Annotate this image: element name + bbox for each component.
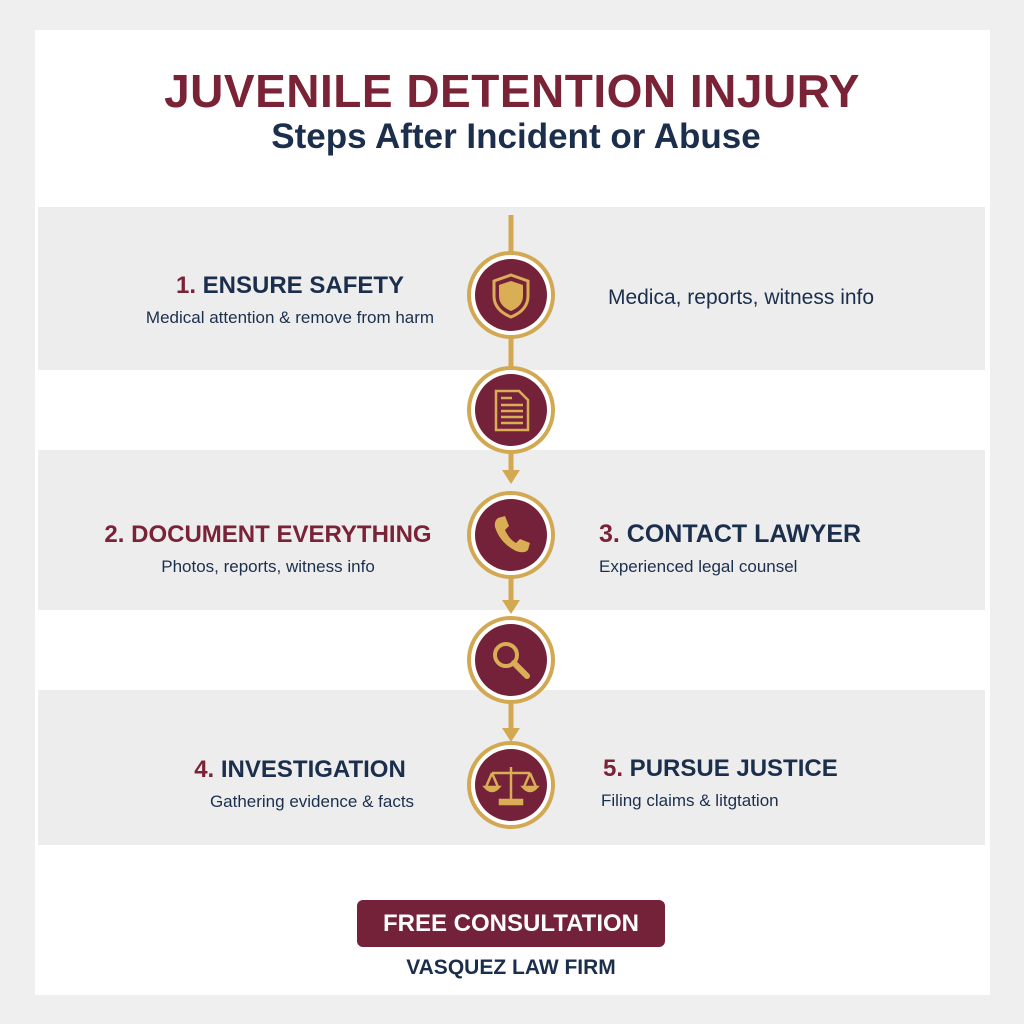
band: row 1: [38, 207, 985, 370]
step 5: 5. PURSUE JUSTICE: [603, 755, 838, 782]
button: free consultation: [357, 900, 665, 947]
step 5: [601, 755, 838, 810]
step 3: Experienced legal counsel: [599, 557, 797, 576]
icon: magnifier: [469, 618, 553, 702]
band: row 3: [38, 690, 985, 845]
step 4: Gathering evidence & facts: [210, 792, 414, 811]
icon: phone: [469, 493, 553, 577]
firm name: VASQUEZ LAW FIRM: [406, 956, 616, 979]
title: JUVENILE DETENTION INJURY: [164, 65, 860, 117]
icon: shield: [469, 253, 553, 337]
step 1: 1. ENSURE SAFETY: [176, 272, 404, 299]
step 2: Photos, reports, witness info: [161, 557, 375, 576]
step 5: Filing claims & litgtation: [601, 791, 779, 810]
icon: scales: [469, 743, 553, 827]
step 4: [194, 756, 414, 811]
subtitle: Steps After Incident or Abuse: [271, 117, 761, 156]
band: row 2: [38, 450, 985, 610]
button: free consultation: FREE CONSULTATION: [383, 910, 639, 937]
step 1 note: Medica, reports, witness info: [608, 286, 874, 309]
step 3: [599, 520, 861, 576]
step 1: [146, 272, 434, 327]
step 2: 2. DOCUMENT EVERYTHING: [104, 521, 432, 548]
icon: document: [469, 368, 553, 452]
step 3: 3. CONTACT LAWYER: [599, 520, 861, 548]
step 4: 4. INVESTIGATION: [194, 756, 406, 783]
step 1: Medical attention & remove from harm: [146, 308, 434, 327]
step 2: [104, 521, 432, 576]
